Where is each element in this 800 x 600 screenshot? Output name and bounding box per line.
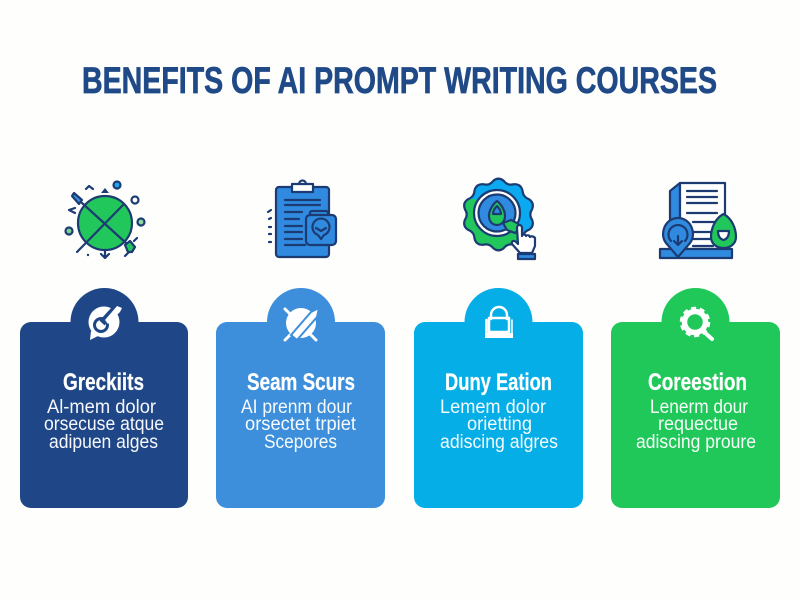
icon: gear with hand pointer [455,179,535,260]
body text: orietting [467,414,532,435]
body text: adiscing proure [636,432,756,453]
icon: document with location pin and drop [660,183,736,258]
panel: Seam Scurs [216,288,385,508]
icon: magnifier gear [682,308,712,339]
body text [440,397,558,453]
icon: target circle with crossing tools [66,182,144,258]
body text: Al-mem dolor [47,397,157,418]
body text [44,397,164,453]
heading: Duny Eation [445,369,552,396]
body text: Scepores [264,432,337,453]
body text: AI prenm dour [241,397,353,418]
body text [241,397,357,453]
panel: Duny Eation [414,288,583,508]
icon: padlock on laptop [485,307,513,338]
heading: Coreestion [648,369,747,396]
icon: clipboard with badge [268,180,336,257]
body text: Lenerm dour [650,397,749,418]
body text: requectue [658,414,738,435]
heading: Greckiits [63,369,144,396]
icon: crossed pencil and ball [285,308,319,340]
icon: chat target and pencil [88,306,122,340]
panel: Greckiits [20,288,188,508]
body text: orsecuse atque [44,414,164,435]
body text: adipuen alges [49,432,158,453]
body text: adiscing algres [440,432,558,453]
heading: Seam Scurs [247,369,355,396]
body text: Lemem dolor [440,397,547,418]
body text [636,397,756,453]
panel: Coreestion [611,288,780,508]
body text: orsectet trpiet [245,414,357,435]
